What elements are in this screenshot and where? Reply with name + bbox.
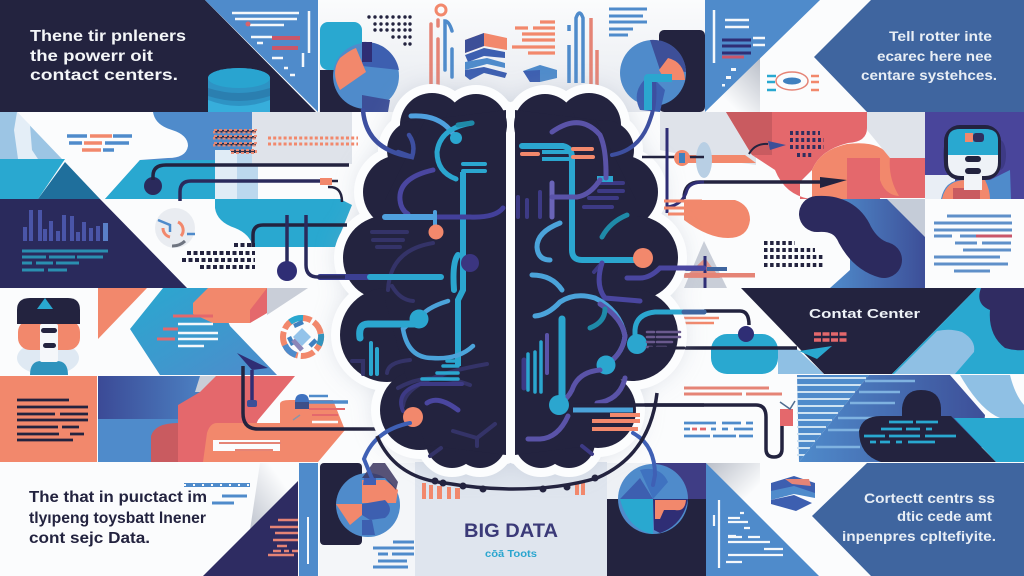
teal stair [422, 361, 458, 379]
purple stem [550, 183, 554, 217]
dot grid [764, 243, 825, 265]
heading: top right text: Tell rotter inte [889, 28, 992, 44]
dot grid [367, 15, 412, 46]
dim line cluster [647, 332, 680, 347]
heading: bottom left text: The that in puıctact im [29, 489, 207, 506]
icon: eye symbol [767, 72, 819, 90]
teal main path [522, 146, 643, 260]
arrow [684, 177, 847, 199]
heading: bottom right text: Cortectt centrs ss [864, 490, 995, 506]
heading: bottom right text: dtic cede amt [897, 508, 992, 524]
stripes and blue band [797, 375, 1024, 462]
brain soft shadow [340, 93, 678, 468]
heading: top right text [861, 28, 997, 83]
panel: row five right [573, 375, 1024, 462]
blue text lines [934, 216, 1012, 271]
icon: VR avatar [17, 298, 80, 375]
big lower arc with nodes [377, 393, 657, 492]
panel: contact center [684, 288, 1024, 374]
junction arcs [403, 301, 473, 358]
coral lines [684, 388, 782, 394]
blue and coral lines [573, 408, 633, 412]
dot grid [182, 245, 255, 267]
panel: row two right [660, 112, 925, 199]
heading: top right text: ecarec here nee [877, 48, 992, 64]
icon: isometric stack [771, 476, 815, 511]
teal blob [215, 199, 352, 247]
coral text lines [512, 22, 555, 53]
blue hook [537, 223, 560, 260]
panel: top centre graphics [319, 0, 705, 112]
panel: bottom left text [29, 463, 318, 576]
purple lower cable [599, 263, 704, 298]
left hemisphere [340, 93, 507, 468]
circuits: right hemisphere [518, 78, 704, 485]
panel: row four left [17, 288, 321, 375]
teal arc [437, 123, 472, 179]
teal hook and circle [635, 312, 704, 342]
panel: top right text [814, 0, 1024, 112]
small text lines in blue triangle [232, 11, 309, 75]
purple top arc [552, 123, 606, 173]
heading: bottom left text: cont sejc Data. [29, 530, 150, 547]
heading: top left text: contact centers. [30, 67, 178, 84]
navy long cable [573, 403, 704, 407]
panel: row five left [0, 353, 380, 462]
coral cell grid [814, 334, 848, 340]
panel: top right blue triangle [705, 0, 820, 112]
chart: left lower pie [336, 463, 400, 537]
subtitle: cōā Toots [485, 549, 537, 560]
heading: top left text: Thene tir pnleners [30, 28, 186, 45]
coral tool [684, 141, 786, 178]
horizontal cable [385, 214, 435, 220]
panel: bottom right text [706, 463, 1024, 576]
brain halo [340, 93, 678, 468]
row two connectors: navy cables [144, 128, 704, 281]
icon: isometric stack [465, 33, 507, 80]
chart: coral and blue column lines [431, 5, 452, 85]
chart: right pie [620, 40, 686, 112]
heading: bottom left text: tlyıpeng toysbatt lnener [29, 510, 206, 527]
teal text lines [864, 422, 956, 442]
heading: top left text [30, 28, 186, 84]
teal trunk [458, 172, 463, 366]
S-shaped blob [817, 214, 884, 260]
text lines [373, 542, 414, 567]
purple arc [400, 170, 433, 214]
text lines on blob [157, 316, 218, 346]
icon: colour wheel [283, 318, 321, 356]
heading: bottom right text [842, 490, 996, 544]
panel: row three left [0, 199, 352, 288]
heading: bottom left text [29, 489, 207, 547]
purple branches [427, 400, 458, 410]
heading: top left text: the powerr oit [30, 48, 154, 65]
icon: small isometric block [523, 65, 557, 82]
dim text lines and arcs [352, 232, 495, 456]
dark dome [859, 390, 996, 462]
white text lines [714, 500, 783, 568]
icon: gauge ring [155, 208, 195, 248]
dim lines and bars [518, 183, 623, 272]
icon: graduation cap and cable [237, 353, 380, 429]
brain: white halo and hemispheres [340, 93, 678, 468]
purple arrow cable [363, 110, 413, 157]
panel: bottom centre graphics [319, 462, 706, 576]
heading: top right text: centare systehces. [861, 67, 997, 83]
text lines [67, 136, 132, 150]
cable to upper pie [612, 82, 654, 155]
panel: row two left [0, 112, 358, 199]
chart: bar chart [23, 210, 108, 241]
blue cable [364, 423, 410, 481]
navy cable and plug [573, 401, 795, 457]
chart: right lower pie [618, 464, 688, 534]
chart: left pie [333, 42, 399, 112]
right hemisphere [514, 93, 678, 468]
text panel [925, 199, 1024, 288]
card lines [293, 394, 348, 422]
horizontal to brain [642, 156, 704, 158]
dot grid over blue [214, 130, 256, 153]
coral text lines [522, 149, 593, 157]
blue cable to pie [633, 433, 655, 485]
text lines under bars [22, 251, 108, 270]
teal blob and cable [684, 311, 832, 374]
text lines on coral [17, 400, 88, 440]
label: contact center: Contat Center [809, 306, 920, 321]
blue arc [411, 116, 455, 137]
chart: blue arches and coral columns [569, 13, 597, 85]
title: Big Data: BIG DATA [464, 521, 558, 542]
heading: bottom right text: inpenpres cpltefiyite. [842, 528, 996, 544]
text lines top right of centre [609, 9, 647, 35]
circuits: left hemisphere [320, 110, 503, 485]
panel: row three right [684, 199, 1024, 288]
bars [522, 360, 526, 388]
coral shape [726, 112, 867, 199]
coral lines [268, 520, 298, 555]
coral dashed lines [268, 138, 358, 144]
purple lower lines [528, 416, 568, 439]
panel: avatar top right [925, 112, 1024, 199]
middle blue arc [535, 296, 625, 362]
gray peak and cross [684, 241, 755, 288]
chart: tiny bars along arc [422, 482, 585, 499]
dot grid on coral [790, 133, 824, 155]
panel: top left text [0, 0, 318, 112]
icon: database cylinder [208, 68, 270, 112]
